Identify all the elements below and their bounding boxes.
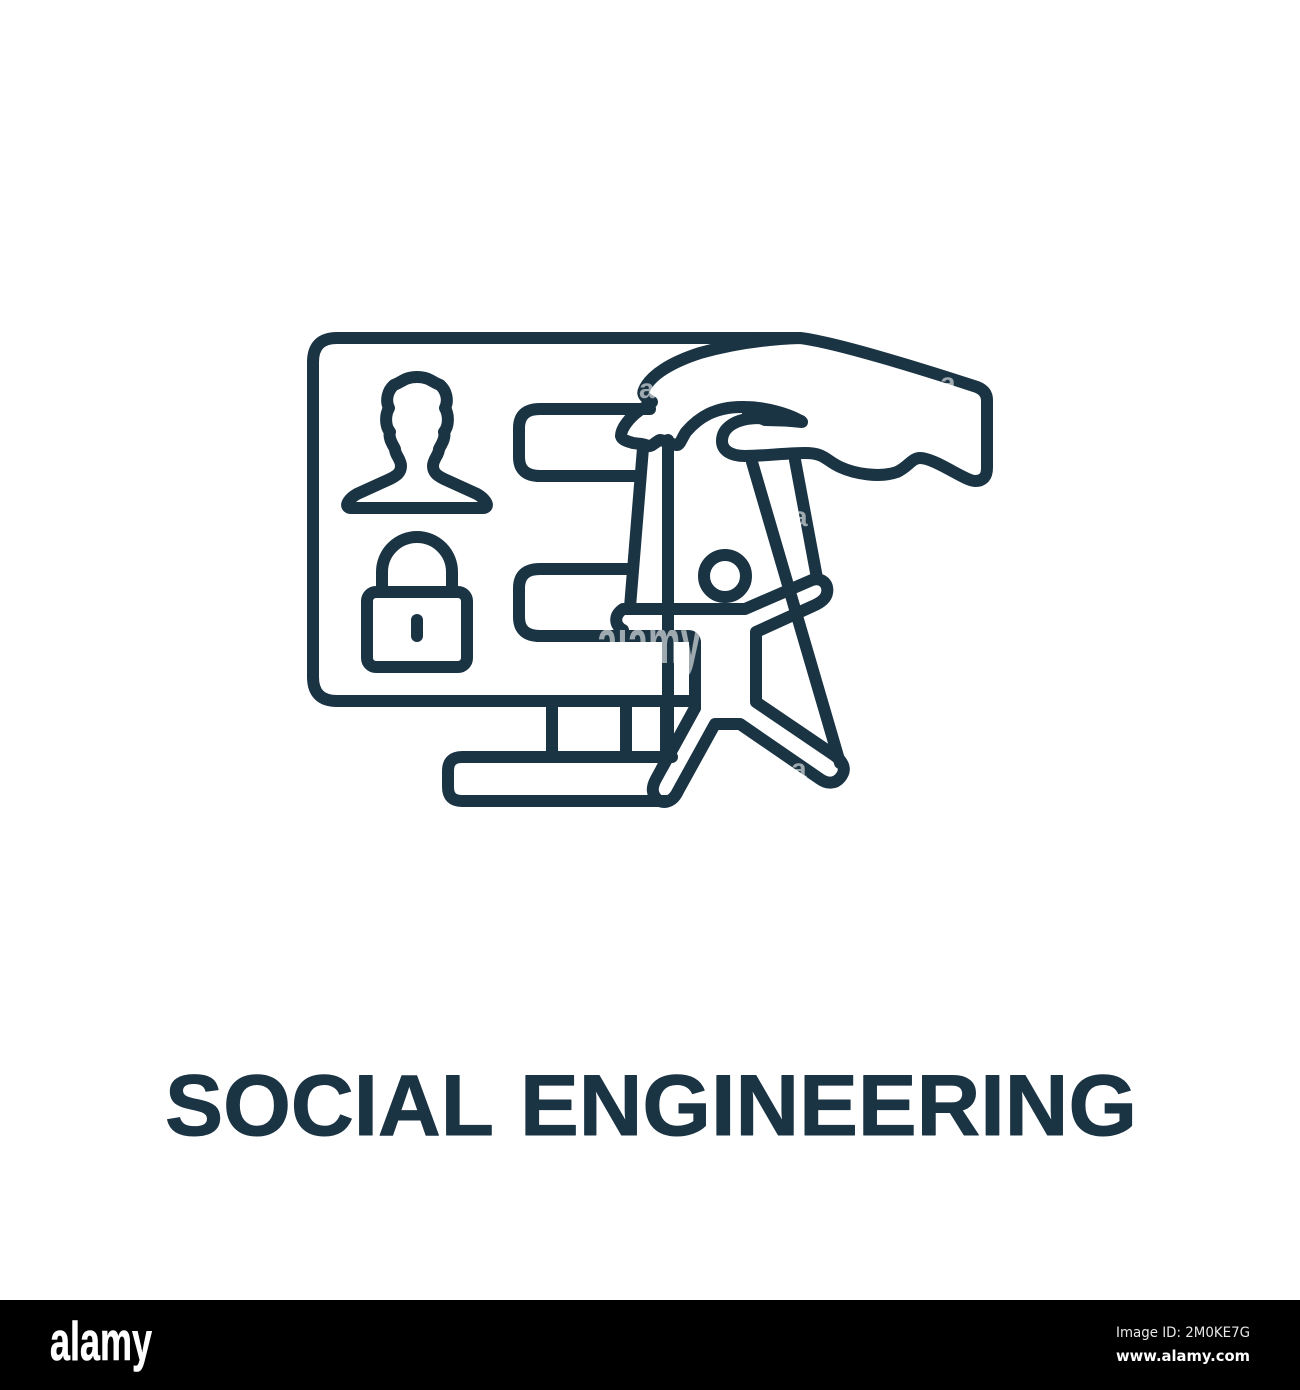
watermark: alamy [597,608,701,677]
infographic canvas [0,332,1300,1390]
icon: computer monitor [313,338,800,801]
icon: puppet body [616,579,844,802]
watermark: a [791,753,807,784]
icon: social engineering illustration [313,338,987,802]
watermark [597,367,956,784]
title: SOCIAL [165,1058,494,1154]
footer logo: alamy [50,1310,152,1372]
watermark: a [940,367,956,398]
title: ENGINEERING [520,1058,1137,1154]
icon: padlock [367,537,467,667]
footer bar [0,1300,1300,1390]
icon: login input field top [519,409,650,476]
footer website: www.alamy.com [1116,1347,1250,1365]
icon: puppet strings [630,440,840,763]
icon: hand controlling puppet [621,338,987,481]
icon: user profile silhouette [347,377,487,508]
icon: puppet head [704,555,746,597]
title [165,1058,1137,1154]
watermark: a [792,501,808,532]
icon: login input field bottom [519,569,695,643]
footer image id: Image ID: 2M0KE7G [1116,1325,1250,1341]
watermark: a [639,373,655,404]
